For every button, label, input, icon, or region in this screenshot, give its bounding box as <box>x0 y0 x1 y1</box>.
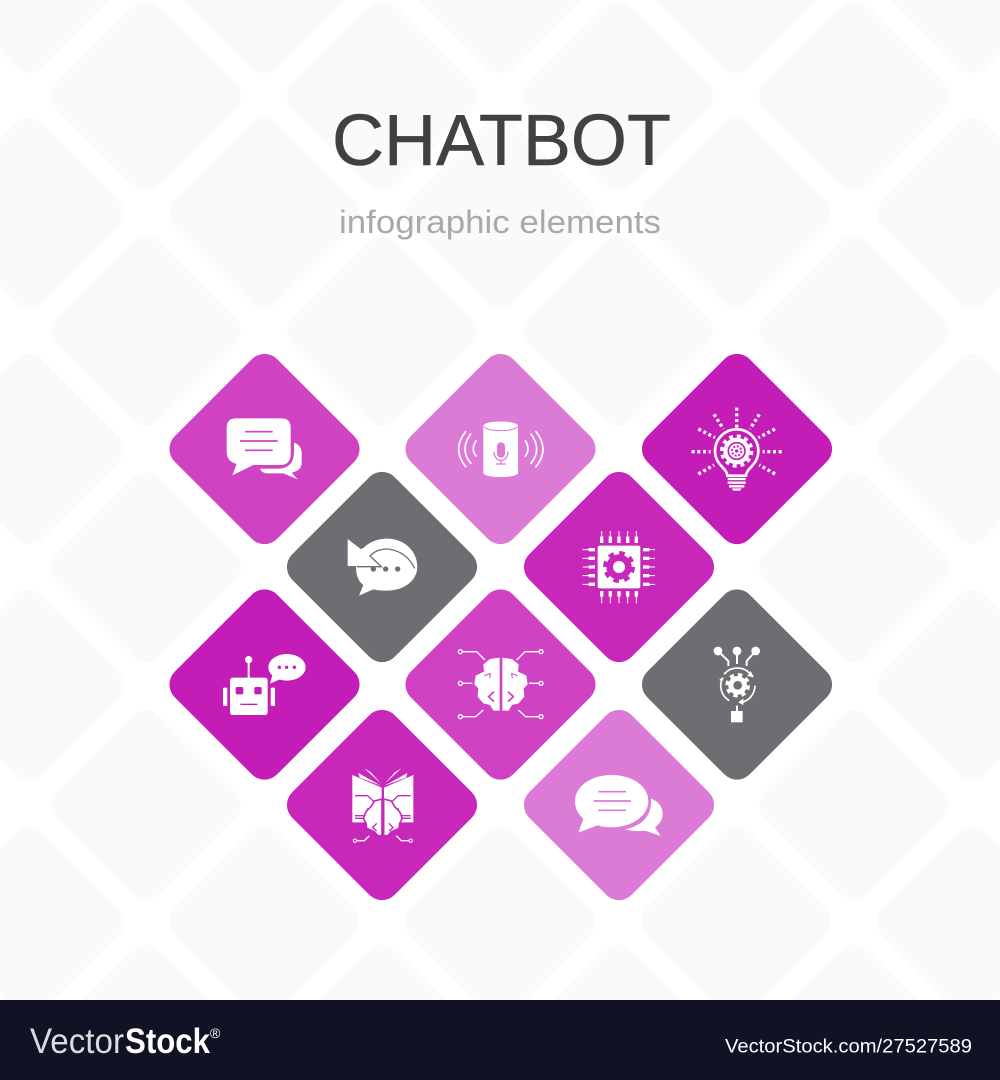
panel: gear process <box>634 582 840 787</box>
panel: idea bulb <box>634 346 840 552</box>
panel: processor <box>516 464 722 670</box>
icon: light bulb with gear and rays <box>692 408 782 491</box>
subtitle: infographic elements <box>339 204 661 240</box>
panel: voice assistant speaker <box>398 346 603 552</box>
icon: open book with brain <box>352 768 413 842</box>
footer bar <box>0 1000 1000 1080</box>
icon: gear with cycle arrows and nodes <box>714 647 760 722</box>
panel: artificial brain <box>398 582 603 787</box>
icon: smart speaker with microphone <box>459 421 543 477</box>
panel: chat bubbles, top left <box>162 346 367 552</box>
footer logo: ® <box>210 1025 221 1041</box>
footer logo: Vector <box>30 1022 124 1061</box>
panel: oval chat <box>516 702 722 908</box>
icon: oval speech bubbles <box>575 775 663 836</box>
icon: brain with circuits <box>458 650 543 719</box>
panel: reply chat <box>279 464 485 670</box>
panel: brain and book <box>279 702 485 908</box>
title: CHATBOT <box>332 101 671 181</box>
icon: square speech bubbles <box>227 418 302 479</box>
footer logo: Stock <box>125 1022 210 1061</box>
footer image id: VectorStock.com/27527589 <box>725 1036 972 1058</box>
icon: robot with speech bubble <box>223 654 306 715</box>
panel: robot <box>162 582 367 787</box>
icon: reply arrow with speech bubble <box>348 539 417 596</box>
icon: chip with gear <box>583 531 655 603</box>
footer logo <box>30 1022 221 1061</box>
